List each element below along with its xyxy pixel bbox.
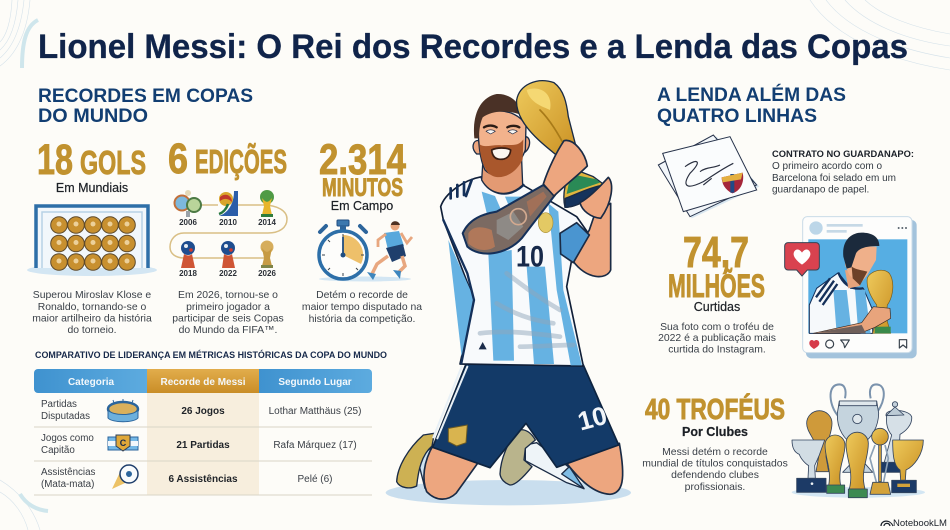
text: goals description: Superou Miroslav Klose e xyxy=(33,290,151,301)
logo: NotebookLM: NotebookLM xyxy=(893,518,947,529)
silver league trophy xyxy=(792,440,825,478)
stat: 18 goals xyxy=(37,136,146,195)
text: likes description: Sua foto com o troféu de xyxy=(660,322,774,333)
row: knockout assists: (Mata-mata) xyxy=(41,479,94,490)
text: trophies description: Messi detém o recorde xyxy=(662,447,768,458)
stat: 40 trophies xyxy=(645,392,785,439)
row: captain games: Jogos como xyxy=(41,433,94,444)
row: matches played: Disputadas xyxy=(41,411,90,422)
row: captain games: Capitão xyxy=(41,445,75,456)
text: editions description: Em 2026, tornou-se o xyxy=(178,290,278,301)
icon: stopwatch xyxy=(319,220,411,282)
text: trophies description: mundial de títulos conquistados xyxy=(642,458,788,470)
small silver cup xyxy=(884,410,912,463)
text: napkin contract: guardanapo de papel. xyxy=(772,184,869,196)
golden trophies xyxy=(825,432,923,489)
row: captain games: 21 Partidas xyxy=(176,440,230,451)
icon: 2022 xyxy=(221,241,235,268)
jersey folds xyxy=(480,273,573,347)
post photo: Messi kissing trophy xyxy=(809,233,893,333)
text: napkin contract: Barcelona foi selado em um xyxy=(772,173,896,184)
text: minutes description: Detém o recorde de xyxy=(316,290,408,301)
champions cup xyxy=(831,384,884,418)
row: knockout assists xyxy=(41,465,333,490)
text: likes description: 2022 é a publicação mais xyxy=(658,333,776,344)
icon: signed napkin xyxy=(658,135,759,218)
icon: captain armband: C xyxy=(120,438,127,448)
icon: Instagram post card xyxy=(785,217,917,358)
heading: records: DO MUNDO xyxy=(38,105,148,127)
illustration: Messi kneeling with trophy xyxy=(386,81,631,505)
stat: 2,314 minutes: Em Campo xyxy=(331,199,393,213)
icon: club trophies xyxy=(792,384,925,498)
stat: 6 editions: 6 xyxy=(168,135,188,183)
stat: 2,314 minutes: MINUTOS xyxy=(322,174,403,202)
text: goals description: maior artilheiro da história xyxy=(32,314,152,324)
World Cup trophy xyxy=(517,81,605,207)
stat: 2,314 minutes: 2.314 xyxy=(319,136,406,184)
icon: like bubble xyxy=(785,243,819,276)
timeline: six World Cups xyxy=(170,190,287,278)
row: matches played: Lothar Matthäus (25) xyxy=(269,406,361,417)
stat: 6 editions: EDIÇÕES xyxy=(195,143,287,180)
icon: 2018 xyxy=(181,241,195,268)
text: minutes description: história da competição. xyxy=(309,314,415,325)
text: minutes description: maior tempo disputado na xyxy=(302,302,422,313)
row: matches played xyxy=(41,399,361,422)
stat: 74.7 million likes: Curtidas xyxy=(694,300,740,314)
timeline: six World Cups: 2006 xyxy=(179,218,197,227)
head and neck xyxy=(473,94,530,193)
icon: ball with motion trail xyxy=(112,465,138,489)
text: goals description: do torneio. xyxy=(67,325,117,336)
boots and socks xyxy=(397,430,584,493)
title: Lionel Messi: O Rei dos Recordes e a Lenda das Copas xyxy=(38,28,908,66)
row: matches played: Partidas xyxy=(41,399,77,410)
row: captain games: Rafa Márquez (17) xyxy=(273,440,357,451)
timeline: six World Cups: 2010 xyxy=(219,218,237,227)
timeline: six World Cups: 2018 xyxy=(179,269,197,278)
back gold trophy xyxy=(807,411,832,472)
illustration: Messi kneeling with trophy: 10 xyxy=(574,400,610,436)
row: captain games xyxy=(41,433,357,456)
heading: comparison table: COMPARATIVO DE LIDERANÇA EM MÉTRICAS HISTÓRICAS DA COPA DO MUNDO xyxy=(35,349,387,360)
text: trophies description: profissionais. xyxy=(685,482,745,493)
club world cup trophy xyxy=(870,445,888,483)
hands xyxy=(543,140,612,218)
shorts xyxy=(433,361,619,468)
left forearm and armband xyxy=(560,203,611,277)
row: knockout assists: Assistências xyxy=(41,467,96,478)
row: knockout assists: 6 Assistências xyxy=(168,474,238,485)
icon: 2026 xyxy=(260,240,274,268)
panel: records in World Cups xyxy=(27,85,422,336)
icon: goal with 18 balls xyxy=(27,206,157,276)
jersey xyxy=(441,177,588,366)
raised tattooed arm xyxy=(463,185,555,254)
heading: legend: A LENDA ALÉM DAS xyxy=(657,83,846,106)
table header: Segundo Lugar xyxy=(278,377,352,388)
stat: 6 editions xyxy=(168,135,287,183)
panel: beyond the pitch xyxy=(642,83,925,498)
jersey stripes xyxy=(448,192,582,365)
stat: 18 goals: 18 xyxy=(37,136,73,184)
stat: 18 goals: Em Mundiais xyxy=(56,181,128,195)
icon: stadium xyxy=(108,399,138,422)
table header: Categoria xyxy=(68,377,114,388)
text: napkin contract xyxy=(772,149,914,196)
stat: 74.7 million likes: 74,7 xyxy=(683,228,749,277)
table: leadership comparison xyxy=(34,369,372,495)
text: editions description: do Mundo da FIFA™. xyxy=(179,325,277,336)
icon: 2010 xyxy=(218,191,238,216)
icon: captain armband xyxy=(108,435,138,451)
ground shadow xyxy=(386,480,631,505)
text: goals description: Ronaldo, tornando-se o xyxy=(38,302,147,313)
row: matches played: 26 Jogos xyxy=(181,406,225,417)
icon: runner xyxy=(367,221,412,280)
row: knockout assists: Pelé (6) xyxy=(297,474,333,485)
text: likes description: curtida do Instagram. xyxy=(668,344,766,356)
text: editions description: participar de seis Copas xyxy=(172,314,284,324)
text: napkin contract: CONTRATO NO GUARDANAPO: xyxy=(772,149,914,159)
stat: 74.7 million likes xyxy=(668,228,765,314)
legs xyxy=(424,443,623,499)
stat: 18 goals: GOLS xyxy=(80,144,146,181)
timeline: six World Cups: 2014 xyxy=(258,218,276,227)
icon: 2006 xyxy=(174,190,201,217)
text: trophies description: defendendo clubes xyxy=(671,470,759,481)
icon: 2014 xyxy=(260,190,274,217)
heading: records: RECORDES EM COPAS xyxy=(38,85,253,107)
heading: legend: QUATRO LINHAS xyxy=(657,105,817,127)
stat: 2,314 minutes xyxy=(319,136,406,213)
stat: 40 trophies: 40 TROFÉUS xyxy=(645,392,785,426)
table header: Recorde de Messi xyxy=(160,377,246,388)
stat: 40 trophies: Por Clubes xyxy=(682,425,748,439)
timeline: six World Cups: 2026 xyxy=(258,269,276,278)
text: editions description: primeiro jogador a xyxy=(186,302,270,313)
timeline: six World Cups: 2022 xyxy=(219,269,237,278)
table header xyxy=(34,369,372,393)
stat: 74.7 million likes: MILHÕES xyxy=(668,268,765,304)
illustration: Messi kneeling with trophy: 10 xyxy=(516,241,544,274)
text: napkin contract: O primeiro acordo com o xyxy=(772,161,882,172)
